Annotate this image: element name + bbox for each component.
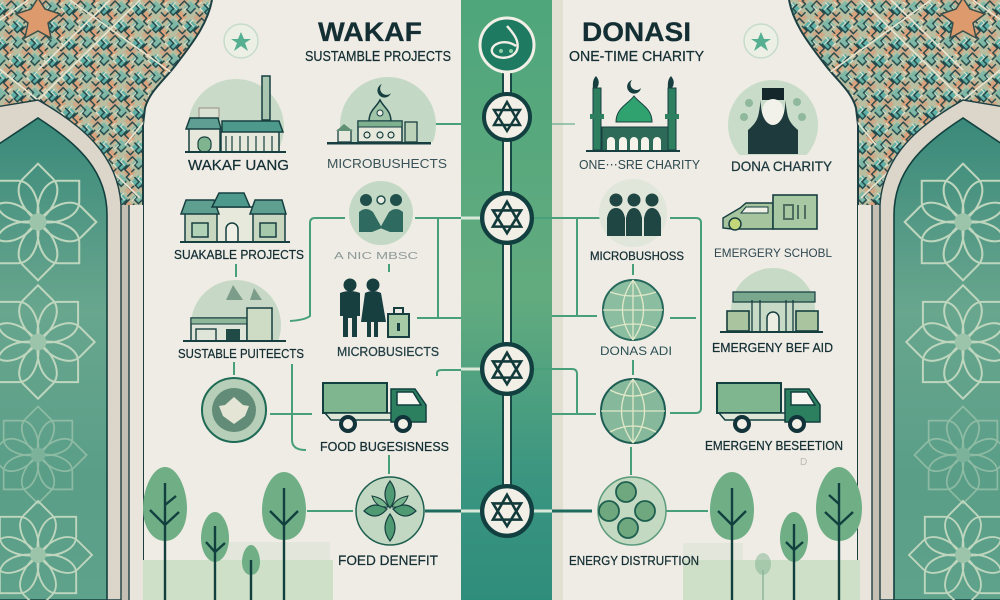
- label: Sustable Projects: SUSTABLE PUITEECTS: [178, 346, 304, 361]
- label: Food Business: FOOD BUGESISNESS: [320, 439, 449, 454]
- label: Emergency Relief Aid: EMERGENY BEF AID: [712, 340, 833, 355]
- title: Donasi: DONASI: [582, 17, 691, 47]
- right ornamental arch panel: [789, 0, 1000, 600]
- icon: aid buildings: [720, 268, 823, 333]
- icon: mosque in circle: [327, 77, 436, 144]
- subtitle: Wakaf: SUSTAMBLE PROJECTS: [305, 48, 451, 65]
- icon: four seeds medallion: [598, 477, 666, 545]
- label: Suakable Projects: SUAKABLE PROJECTS: [174, 247, 304, 262]
- right connector lines: [530, 124, 708, 511]
- central timeline spine: [502, 70, 512, 511]
- icon: delivery truck right: [717, 383, 820, 431]
- label: Donas Adi: DONAS ADI: [600, 344, 672, 358]
- timeline node 3: [482, 344, 532, 394]
- timeline node 4: [482, 486, 532, 536]
- label: Emergency School: EMERGERY SCHOBL: [714, 246, 832, 260]
- icon: people with bag: [340, 278, 409, 337]
- icon: leaves medallion: [356, 477, 424, 545]
- icon: delivery truck left: [323, 383, 426, 431]
- timeline node 1: [484, 94, 530, 140]
- label: Microbusiness top: MICROBUSHECTS: [327, 156, 447, 171]
- icon: three people: [599, 179, 667, 247]
- horizontal spokes inside band: [461, 218, 552, 511]
- icon: two people circle: [349, 181, 413, 245]
- left ornamental arch panel: [0, 0, 212, 600]
- icon: leaf medallion: [202, 378, 266, 442]
- label: Dona Charity: DONA CHARITY: [731, 158, 833, 174]
- label: Food Benefit: FOED DENEFIT: [338, 552, 438, 568]
- icon: factory with tower: [185, 75, 286, 153]
- label: Wakaf Uang: WAKAF UANG: [188, 157, 289, 174]
- right ground: [683, 543, 860, 600]
- label: One-time charity: ONE⋯SRE CHARITY: [579, 157, 700, 172]
- label: faint mosque caption: A NIC MBSC: [334, 251, 418, 262]
- icon: globe lower: [601, 379, 665, 443]
- icon: charity person: [728, 80, 818, 155]
- left trees: [143, 467, 306, 600]
- label: Energy Distribution: ENERGY DISTRUFTION: [569, 553, 699, 568]
- label: Emergency Distribution: EMERGENY BESEETION: [705, 438, 843, 453]
- label: Microbushoss: MICROBUSHOSS: [590, 249, 684, 263]
- label: Microbusiness: MICROBUSIECTS: [337, 344, 439, 359]
- left star badge: [224, 24, 258, 58]
- icon: emergency van: [723, 195, 817, 230]
- top emblem: [480, 18, 534, 72]
- right trees: [710, 467, 862, 600]
- timeline node 2: [482, 193, 532, 243]
- subtitle: Donasi: ONE-TIME CHARITY: [569, 48, 704, 65]
- left connector lines: [234, 124, 461, 511]
- central green band: [461, 0, 563, 600]
- icon: globe top: [603, 280, 663, 340]
- title: Wakaf: WAKAF: [318, 17, 422, 47]
- left ground: [143, 542, 333, 600]
- label: faint letter: D: [800, 457, 807, 468]
- icon: buildings in circle: [183, 280, 286, 342]
- icon: mosque with minarets: [586, 76, 680, 152]
- icon: three roofed houses: [180, 193, 290, 243]
- right star badge: [744, 24, 778, 58]
